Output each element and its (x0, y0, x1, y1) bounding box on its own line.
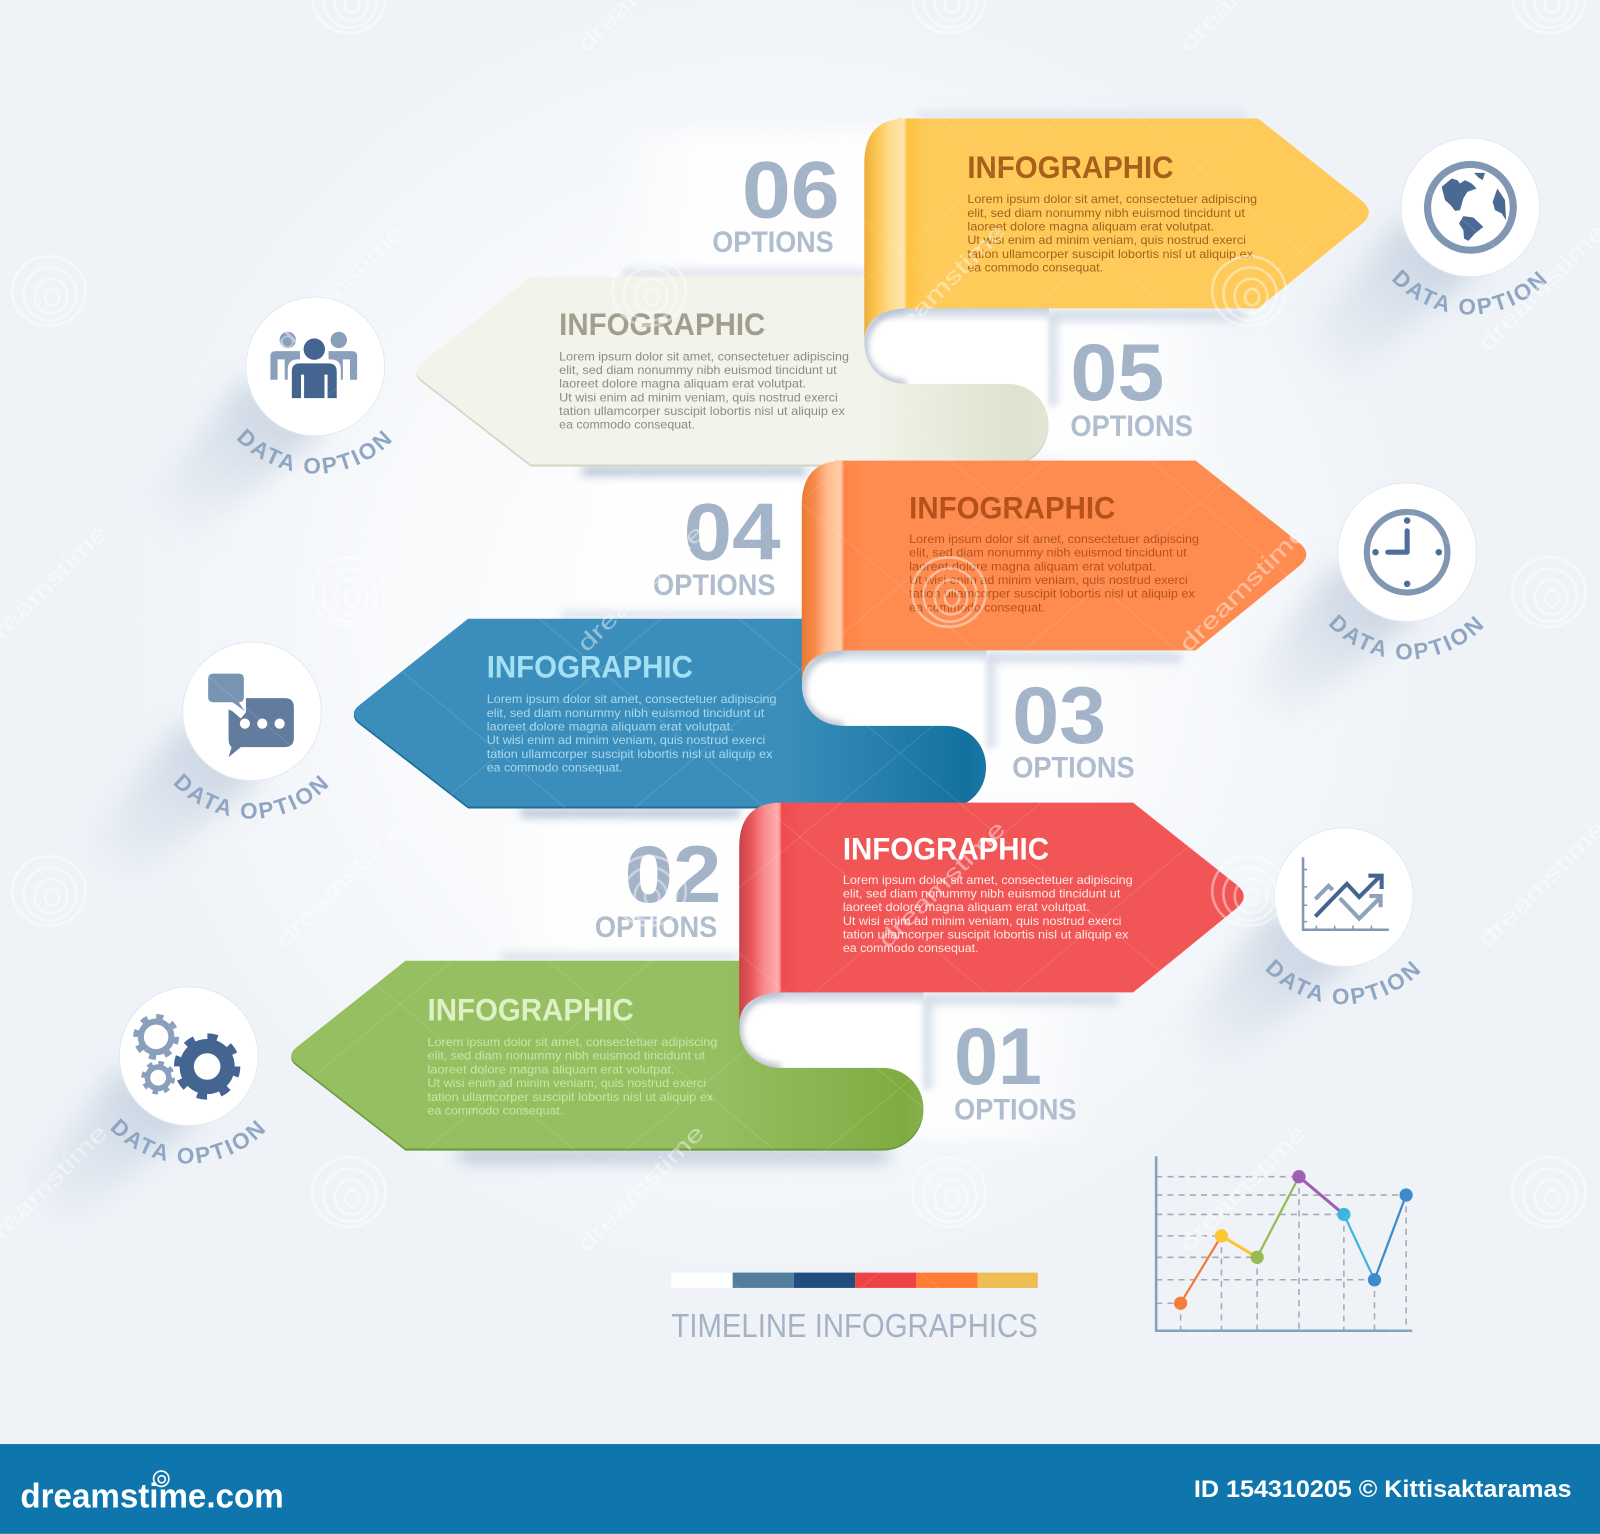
icon: line chart badge (1266, 828, 1420, 1004)
text block: step 04: tation ullamcorper suscipit lobortis nisl ut aliquip ex (909, 587, 1195, 601)
text block: step 03 (487, 649, 777, 775)
text block: step 03: tation ullamcorper suscipit lobortis nisl ut aliquip ex (487, 747, 772, 761)
text block: step 06 (967, 149, 1257, 275)
icon: gears badge (110, 986, 266, 1164)
text block: step 01: laoreet dolore magna aliquam erat volutpat. (428, 1062, 674, 1076)
number: 01 options (954, 1012, 1077, 1127)
number: 05 options (1070, 328, 1193, 443)
text block: step 05: INFOGRAPHIC (559, 306, 765, 342)
text block: step 05 (559, 306, 849, 432)
text block: step 03: ea commodo consequat. (487, 761, 622, 775)
watermark text: dreamstime (271, 218, 408, 356)
mini line chart (1156, 1156, 1413, 1331)
text block: step 01: ea commodo consequat. (428, 1103, 563, 1117)
text block: step 02: Ut wisi enim ad minim veniam, quis nostrud exerci (843, 914, 1121, 928)
icon: chat bubbles badge: DATA OPTION (174, 773, 329, 819)
number: 05 options: OPTIONS (1070, 410, 1193, 443)
panel: white fold gaps (739, 304, 1063, 1090)
long shadows behind icon circles (21, 219, 1482, 1226)
icon: people badge (236, 296, 392, 474)
white zones behind numbers and banner shadows (459, 112, 1245, 1160)
watermark text: dreamstime (1473, 815, 1600, 953)
panel: step 01 green arrow (291, 961, 923, 1151)
text block: step 05: ea commodo consequat. (559, 418, 695, 432)
text block: step 04: INFOGRAPHIC (909, 490, 1115, 526)
text block: step 01 (428, 992, 718, 1117)
text block: step 04: ea commodo consequat. (909, 600, 1045, 614)
watermark text: dreamstime (1473, 218, 1600, 356)
icon: clock badge (1328, 482, 1484, 660)
watermark spirals (12, 0, 1586, 1227)
text block: step 02: tation ullamcorper suscipit lobortis nisl ut aliquip ex (843, 928, 1129, 942)
colour legend bar (671, 1273, 1038, 1288)
number: 04 options: 04 (684, 487, 781, 577)
caption: timeline infographics: TIMELINE INFOGRAPHICS (671, 1308, 1038, 1345)
text block: step 06: ea commodo consequat. (967, 261, 1103, 275)
text block: step 01: Ut wisi enim ad minim veniam, quis nostrud exerci (428, 1076, 706, 1090)
footer bar: ID 154310205 © Kittisaktaramas (1194, 1476, 1571, 1503)
icon: people badge: DATA OPTION (236, 428, 392, 474)
number: 06 options: 06 (742, 146, 840, 236)
text block: step 06: INFOGRAPHIC (967, 149, 1173, 185)
text block: step 06: Ut wisi enim ad minim veniam, quis nostrud exerci (967, 233, 1246, 247)
panel: step 02 red arrow (739, 803, 1244, 1023)
text block: step 04: laoreet dolore magna aliquam erat volutpat. (909, 559, 1156, 573)
icon: globe badge: DATA OPTION (1392, 269, 1547, 315)
number: 02 options (595, 830, 721, 944)
watermark text: dreamstime (271, 815, 408, 953)
panel: step 06 yellow arrow (864, 119, 1369, 339)
number: 03 options (1012, 671, 1135, 785)
icon: chat bubbles badge (174, 642, 329, 819)
text block: step 03: Ut wisi enim ad minim veniam, quis nostrud exerci (487, 733, 765, 747)
text block: step 06: elit, sed diam nonummy nibh euismod tincidunt ut (967, 206, 1246, 220)
text block: step 05: Lorem ipsum dolor sit amet, consectetuer adipiscing (559, 349, 849, 363)
watermark text: dreamstime (572, 1119, 709, 1257)
text block: step 02: ea commodo consequat. (843, 941, 979, 955)
number: 05 options: 05 (1070, 328, 1164, 418)
text block: step 02 (843, 830, 1133, 955)
text block: step 01: Lorem ipsum dolor sit amet, consectetuer adipiscing (428, 1035, 718, 1049)
footer bar: dreamstime.com (20, 1477, 284, 1515)
watermark text: dreamstime (873, 218, 1010, 356)
panel: step 04 orange arrow (802, 461, 1306, 681)
text block: step 05: laoreet dolore magna aliquam erat volutpat. (559, 377, 806, 391)
text block: step 04: Ut wisi enim ad minim veniam, quis nostrud exerci (909, 573, 1188, 587)
text block: step 01: tation ullamcorper suscipit lobortis nisl ut aliquip ex (428, 1090, 713, 1104)
watermark text: dreamstime (1174, 1119, 1311, 1257)
text block: step 01: INFOGRAPHIC (428, 992, 634, 1028)
text block: step 01: elit, sed diam nonummy nibh euismod tincidunt ut (428, 1049, 706, 1063)
text block: step 02: Lorem ipsum dolor sit amet, consectetuer adipiscing (843, 873, 1133, 887)
number: 06 options (712, 146, 840, 259)
number: 03 options: OPTIONS (1012, 752, 1135, 785)
icon: gears badge: DATA OPTION (110, 1118, 266, 1164)
icon: line chart badge: DATA OPTION (1266, 959, 1420, 1004)
soft central glow (122, 0, 1429, 1286)
icon: globe badge (1392, 138, 1547, 315)
text block: step 04: elit, sed diam nonummy nibh euismod tincidunt ut (909, 546, 1187, 560)
number: 01 options: OPTIONS (954, 1094, 1077, 1127)
panel: step 05 cream arrow (416, 277, 1048, 466)
text block: step 06: tation ullamcorper suscipit lobortis nisl ut aliquip ex (967, 247, 1253, 261)
footer bar (0, 1444, 1600, 1534)
text block: step 03: INFOGRAPHIC (487, 649, 693, 685)
number: 02 options: OPTIONS (595, 911, 717, 944)
text block: step 02: INFOGRAPHIC (843, 830, 1049, 866)
text block: step 02: elit, sed diam nonummy nibh euismod tincidunt ut (843, 887, 1121, 901)
watermark text: dreamstime (1174, 519, 1311, 657)
watermark text: dreamstime (572, 519, 709, 657)
text block: step 05: Ut wisi enim ad minim veniam, quis nostrud exerci (559, 390, 838, 404)
text block: step 05: tation ullamcorper suscipit lobortis nisl ut aliquip ex (559, 404, 845, 418)
number: 04 options (653, 487, 781, 602)
number: 01 options: 01 (954, 1012, 1042, 1102)
text block: step 05: elit, sed diam nonummy nibh euismod tincidunt ut (559, 363, 837, 377)
number: 02 options: 02 (624, 830, 721, 920)
watermark text: dreamstime (873, 815, 1010, 953)
text block: step 04 (909, 490, 1199, 614)
text block: step 02: laoreet dolore magna aliquam erat volutpat. (843, 900, 1090, 914)
number: 03 options: 03 (1012, 671, 1106, 761)
number: 06 options: OPTIONS (712, 226, 834, 259)
text block: step 06: laoreet dolore magna aliquam erat volutpat. (967, 220, 1214, 234)
text block: step 03: Lorem ipsum dolor sit amet, consectetuer adipiscing (487, 692, 777, 706)
text block: step 03: elit, sed diam nonummy nibh euismod tincidunt ut (487, 706, 765, 720)
number: 04 options: OPTIONS (653, 569, 776, 602)
panel: step 03 blue arrow (354, 619, 986, 809)
text block: step 04: Lorem ipsum dolor sit amet, consectetuer adipiscing (909, 532, 1199, 546)
icon: clock badge: DATA OPTION (1328, 614, 1484, 660)
text block: step 06: Lorem ipsum dolor sit amet, consectetuer adipiscing (967, 192, 1257, 206)
text block: step 03: laoreet dolore magna aliquam erat volutpat. (487, 720, 734, 734)
